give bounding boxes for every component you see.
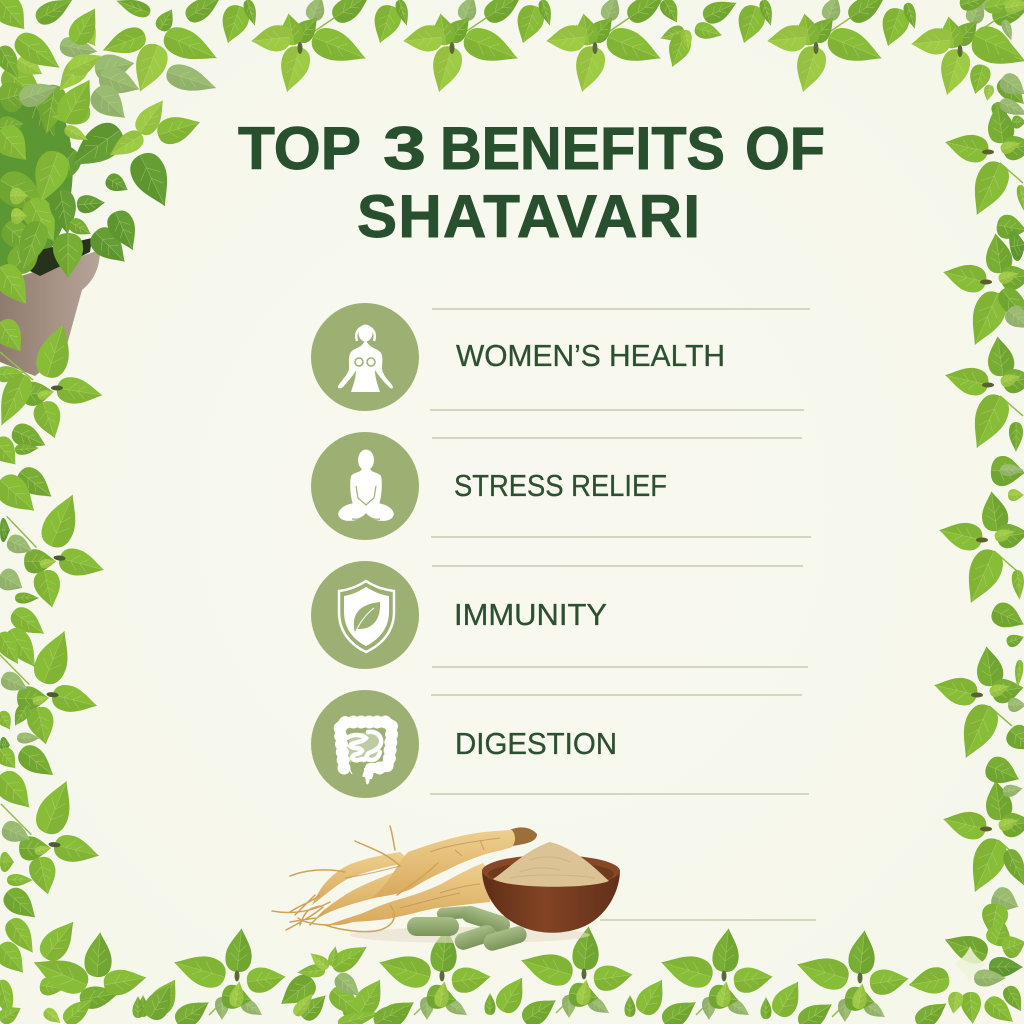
label: IMMUNITY [454, 597, 607, 632]
title: TOP [238, 115, 361, 182]
wooden bowl with powder [482, 842, 620, 933]
icon badge: meditating figure [311, 432, 419, 540]
title: 3 [383, 115, 426, 182]
roots [272, 826, 537, 932]
benefit row: immunity [311, 561, 808, 669]
plant pot [0, 250, 100, 376]
leaf border: left [0, 319, 114, 926]
benefit row: women's health [311, 303, 810, 411]
label: WOMEN’S HEALTH [456, 338, 725, 373]
small sprig between large sprigs [657, 0, 741, 71]
root hairs [272, 826, 438, 932]
title: OF [745, 115, 825, 182]
benefit row: stress relief [311, 432, 811, 540]
capsules [407, 904, 529, 953]
leaf border: top [216, 0, 1024, 127]
bottom-right corner leaves [906, 916, 1024, 1024]
small sprig in the bottom row [274, 938, 413, 1024]
potted shatavari plant, top left [0, 0, 226, 376]
leaf border: right [931, 96, 1024, 938]
bottom-left corner leaves [0, 914, 180, 1024]
title [238, 115, 825, 250]
title: BENEFITS [440, 115, 725, 182]
icon badge: intestines [311, 690, 419, 798]
benefit row: digestion [311, 690, 809, 798]
sparkle mark [954, 946, 986, 982]
leaf border: bottom [0, 914, 1024, 1024]
label: DIGESTION [455, 726, 617, 761]
icon badge: woman [311, 303, 419, 411]
filler leaves on the left edge [0, 365, 61, 926]
icon badge: shield with leaf [311, 561, 419, 669]
foliage mass [0, 0, 226, 359]
title: SHATAVARI [357, 183, 700, 250]
filler leaves on the right edge [979, 96, 1024, 938]
label: STRESS RELIEF [454, 468, 667, 503]
shatavari roots, powder bowl and capsules [272, 826, 620, 953]
